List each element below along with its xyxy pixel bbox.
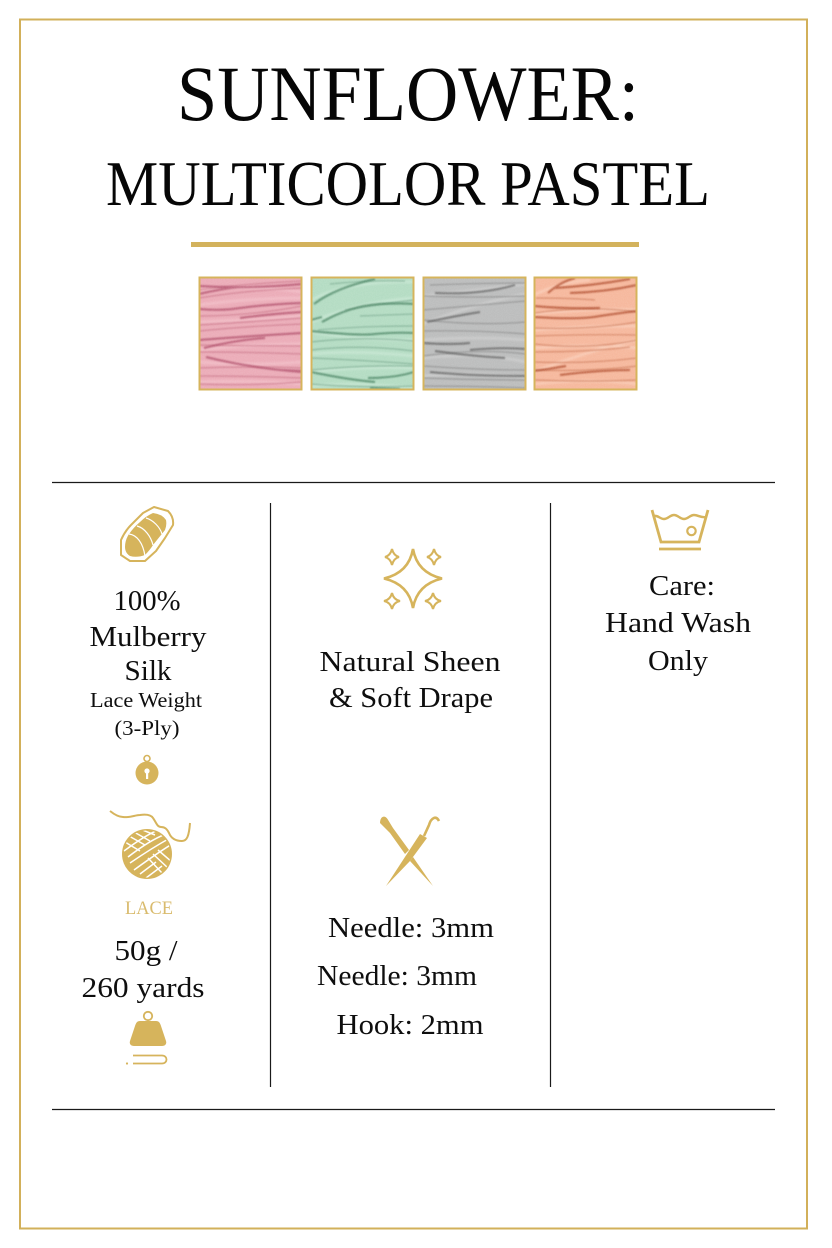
text: weight and yardage: 50g / xyxy=(114,936,178,967)
icon: weight tag xyxy=(136,756,158,784)
title: MULTICOLOR PASTEL xyxy=(106,148,710,219)
column divider right xyxy=(550,503,552,1087)
text: care xyxy=(605,571,751,677)
icon: silk cocoon xyxy=(121,507,173,561)
text: fibre: 100% xyxy=(114,586,180,617)
label: lace: LACE xyxy=(125,898,173,919)
text: fibre xyxy=(90,586,206,740)
icon: hand wash tub xyxy=(652,510,708,549)
text: fibre: Mulberry xyxy=(90,622,206,653)
text: tool sizes: Needle: 3mm xyxy=(317,961,477,992)
icon: crossed needle and hook xyxy=(380,817,439,886)
text: sheen and drape: & Soft Drape xyxy=(329,683,493,714)
panel: right column xyxy=(605,510,751,677)
text: tool sizes: Hook: 2mm xyxy=(336,1010,484,1041)
panel: left column xyxy=(82,507,206,1065)
text: sheen and drape: Natural Sheen xyxy=(320,647,500,678)
column divider left xyxy=(270,503,272,1087)
title: SUNFLOWER: xyxy=(177,50,639,137)
swatch: pink xyxy=(199,277,302,390)
icon: sparkles xyxy=(384,549,442,609)
text: tool sizes xyxy=(317,913,494,1041)
text: fibre: Silk xyxy=(124,656,172,687)
swatch: mint green xyxy=(311,277,414,390)
text: care: Care: xyxy=(649,571,715,602)
icon: scale weight xyxy=(126,1012,166,1065)
text: fibre: Lace Weight xyxy=(90,688,202,712)
text: weight and yardage xyxy=(82,936,204,1004)
yarn swatches xyxy=(199,277,637,390)
panel: middle column xyxy=(317,549,500,1041)
text: fibre: (3-Ply) xyxy=(114,716,180,740)
text: care: Hand Wash xyxy=(605,608,751,639)
text: weight and yardage: 260 yards xyxy=(82,973,204,1004)
title xyxy=(106,50,710,219)
top divider xyxy=(52,482,775,484)
text: sheen and drape xyxy=(320,647,500,714)
gold title rule xyxy=(191,242,639,247)
text: care: Only xyxy=(648,646,708,677)
swatch: gray xyxy=(423,277,526,390)
bottom divider xyxy=(52,1108,775,1110)
icon: yarn ball xyxy=(110,811,190,879)
swatch: peach xyxy=(534,277,637,390)
text: tool sizes: Needle: 3mm xyxy=(328,913,494,944)
